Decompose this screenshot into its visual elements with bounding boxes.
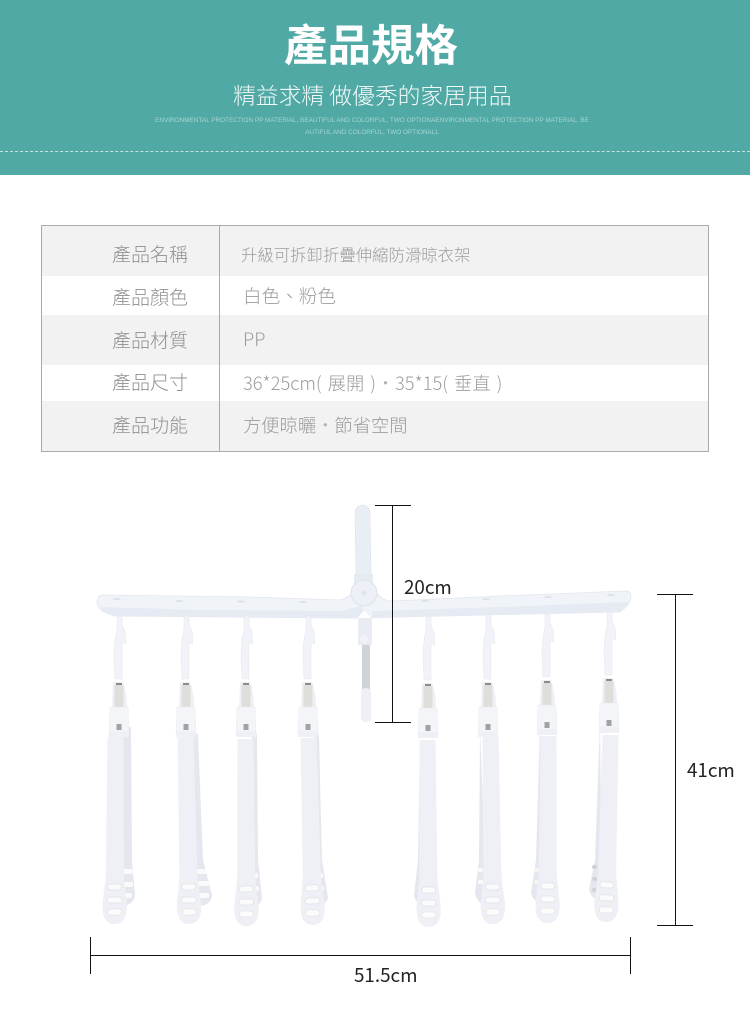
row: size: 36*25cm( 展開 ) 35*15( 垂直 ) bbox=[243, 370, 502, 396]
hanging clip 5 bbox=[414, 617, 441, 927]
row: colour: 白色、粉色 bbox=[243, 282, 336, 309]
hanging clip 4 bbox=[296, 616, 328, 925]
dimension: 20cm bbox=[375, 505, 452, 722]
dimension: 41cm: 41cm bbox=[687, 756, 735, 783]
row: colour bbox=[42, 276, 708, 315]
row: size: 產品尺寸 bbox=[112, 368, 188, 395]
hanging clip 1 bbox=[102, 616, 135, 924]
hanging clip 6 bbox=[475, 616, 505, 924]
row: function: 方便晾曬 節省空間 bbox=[243, 412, 408, 438]
row: colour: 產品顏色 bbox=[112, 283, 188, 310]
dashed divider bbox=[0, 151, 750, 152]
english caption bbox=[155, 117, 589, 136]
hanging clip 8 bbox=[589, 612, 623, 922]
row: name bbox=[42, 226, 708, 276]
column divider bbox=[219, 226, 220, 451]
hanger: main bar and swivel hook bbox=[97, 505, 631, 722]
row: name: 升級可拆卸折疊伸縮防滑晾衣架 bbox=[241, 242, 470, 266]
subtitle: 精益求精 做優秀的家居用品 bbox=[233, 78, 512, 111]
dimension: 20cm: 20cm bbox=[404, 573, 452, 600]
row: name: 產品名稱 bbox=[112, 240, 188, 267]
dimension: 41cm bbox=[657, 594, 735, 926]
english caption: ENVIRONMENTAL PROTECTION PP MATERIAL, BEAUTIFUL AND COLORFUL, TWO OPTIONAENVIRONMENTAL PROTECTION PP MATERIAL, BE bbox=[155, 117, 589, 124]
title: 產品規格 bbox=[284, 11, 458, 74]
spec table bbox=[41, 225, 709, 452]
row: material: 產品材質 bbox=[112, 326, 188, 353]
hanging clip 3 bbox=[233, 616, 262, 926]
english caption: AUTIFUL AND COLORFUL, TWO OPTIONALL bbox=[305, 129, 439, 136]
row: size bbox=[42, 365, 708, 401]
row: function: 產品功能 bbox=[112, 411, 188, 438]
dimension: 51.5cm bbox=[90, 937, 630, 988]
row: function bbox=[42, 401, 708, 451]
hanging clip 2 bbox=[173, 616, 212, 924]
row: material bbox=[42, 315, 708, 365]
header band bbox=[0, 0, 750, 175]
row: material: PP bbox=[243, 326, 265, 352]
hanging clip 7 bbox=[531, 614, 561, 923]
dimension: 51.5cm: 51.5cm bbox=[354, 961, 417, 988]
